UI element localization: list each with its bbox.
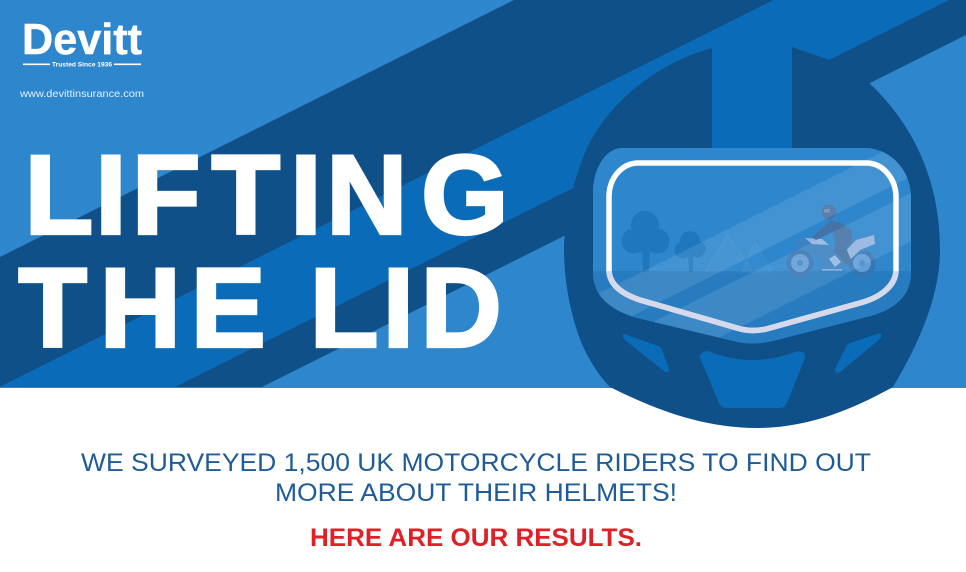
left vent <box>623 334 669 372</box>
survey intro: MORE ABOUT THEIR HELMETS! <box>275 479 677 507</box>
website address: www.devittinsurance.com <box>19 88 144 100</box>
helmet illustration <box>564 47 940 428</box>
background: diagonal stripes <box>0 0 966 388</box>
call to action: HERE ARE OUR RESULTS. <box>310 524 642 552</box>
visor rim <box>609 163 896 330</box>
wheels <box>786 250 814 276</box>
helmet centre stripe <box>712 40 792 150</box>
title: Lifting the Lid: LIFTING <box>25 133 508 258</box>
title: Lifting the Lid <box>18 133 508 371</box>
logo: Devitt: Trusted Since 1936 <box>52 62 113 68</box>
visor reflections <box>599 152 911 338</box>
survey intro <box>81 449 871 507</box>
motorcycle body <box>793 235 875 271</box>
trees <box>622 211 706 272</box>
survey intro: WE SURVEYED 1,500 UK MOTORCYCLE RIDERS TO FIND OUT <box>81 449 871 477</box>
visor surround <box>593 148 911 344</box>
helmet shell <box>564 47 940 428</box>
visor <box>592 148 911 344</box>
right vent <box>835 333 882 373</box>
mountains <box>705 235 772 272</box>
road <box>593 271 911 344</box>
logo: Devitt: Devitt <box>22 15 142 64</box>
motorcycle and rider <box>786 204 876 276</box>
chin vent <box>700 351 805 408</box>
rider <box>812 204 852 264</box>
visor rim shade <box>609 271 896 330</box>
title: Lifting the Lid: THE LID <box>18 246 502 371</box>
